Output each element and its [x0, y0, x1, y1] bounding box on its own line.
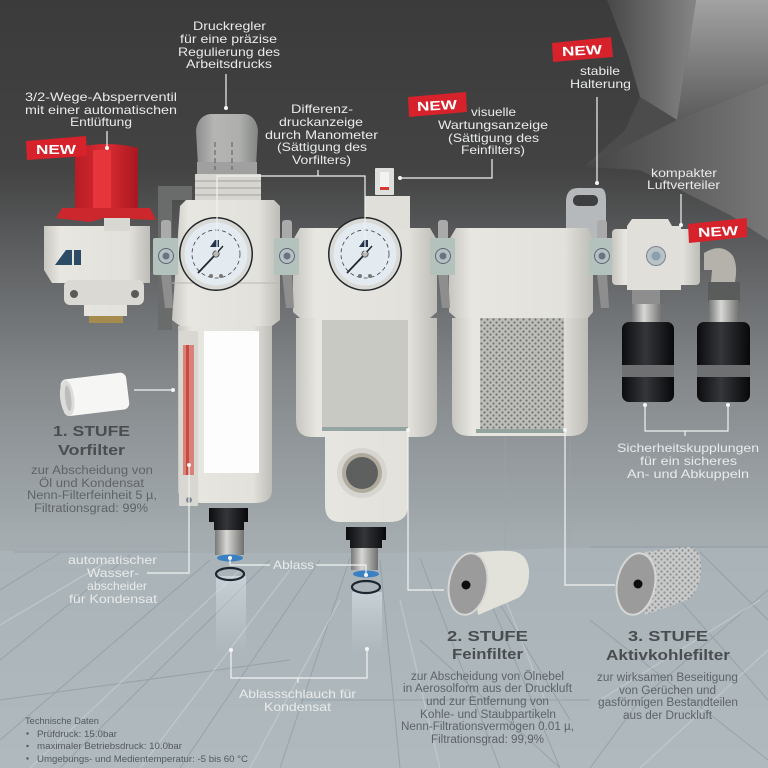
badge: NEW maintenance indicator: [408, 92, 467, 117]
label: bracket: Halterung: [570, 77, 631, 91]
text block: stage 2: Filtrationsgrad: 99,9%: [431, 734, 544, 746]
badge: NEW distributor: [688, 218, 747, 243]
technical data: Technische Daten: [25, 716, 99, 727]
text block: stage 2: Feinfilter: [452, 646, 523, 663]
text block: stage 2: in Aerosolform aus der Druckluft: [403, 683, 573, 695]
label: shut-off valve: [25, 90, 177, 129]
text block: stage 1: zur Abscheidung von: [31, 465, 153, 477]
badge: NEW maintenance indicator: NEW: [417, 97, 458, 114]
text block: stage 1: Öl und Kondensat: [39, 478, 145, 490]
text block: stage 2: Nenn-Filtrationsvermögen 0.01 µ,: [401, 721, 574, 733]
label: maintenance indicator: (Sättigung des: [448, 131, 539, 145]
label: shut-off valve: 3/2-Wege-Absperrventil: [25, 90, 177, 104]
label: air distributor: kompakter: [651, 166, 717, 180]
gauge: differential pressure: [328, 217, 402, 291]
text block: stage 1: 1. STUFE: [53, 423, 130, 440]
label: water separator: abscheider: [87, 579, 147, 593]
label: drain: Ablass: [273, 558, 314, 572]
label: safety couplings: [617, 441, 759, 481]
badge: NEW bracket: NEW: [562, 42, 603, 59]
label: maintenance indicator: Wartungsanzeige: [438, 118, 548, 132]
decorative facets top right: [584, 0, 768, 240]
text block: stage 2: zur Abscheidung von Ölnebel: [411, 671, 564, 683]
label: air distributor: Luftverteiler: [647, 178, 720, 192]
technical data: [25, 716, 248, 765]
label: shut-off valve: mit einer automatischen: [25, 103, 177, 117]
text block: stage 3: gasförmigen Bestandteilen: [598, 697, 738, 709]
label: air distributor: [647, 166, 720, 192]
label: safety couplings: Sicherheitskupplungen: [617, 441, 759, 455]
text block: stage 1: Filtrationsgrad: 99%: [34, 503, 148, 515]
label: pressure regulator: Arbeitsdrucks: [186, 57, 272, 71]
product: stage 1 prefilter: [172, 114, 280, 654]
label: maintenance indicator: visuelle: [471, 105, 516, 119]
badge: NEW valve: [26, 136, 87, 160]
label: water separator: für Kondensat: [69, 592, 158, 606]
label: drain hose: Ablassschlauch für: [239, 687, 356, 701]
technical data: Umgebungs- und Medientemperatur: -5 bis 60 °C: [37, 754, 248, 765]
label: pressure regulator: [178, 19, 280, 71]
text block: stage 2: Kohle- und Staubpartikeln: [420, 709, 556, 721]
label: drain hose: [239, 687, 356, 714]
label: differential pressure: [265, 102, 378, 167]
label: pressure regulator: Druckregler: [193, 19, 266, 33]
label: safety couplings: für ein sicheres: [640, 454, 737, 468]
technical data: Prüfdruck: 15.0bar: [37, 729, 117, 740]
product: mounting brackets: [158, 186, 606, 330]
technical data: maximaler Betriebsdruck: 10.0bar: [37, 741, 182, 752]
text block: stage 3: von Gerüchen und: [619, 685, 716, 697]
leader lines: [105, 74, 730, 683]
text block: stage 3: zur wirksamen Beseitigung: [597, 672, 738, 684]
text block: stage 2: [401, 628, 574, 746]
label: water separator: Wasser-: [87, 566, 139, 580]
label: pressure regulator: für eine präzise: [180, 32, 277, 46]
label: differential pressure: durch Manometer: [265, 128, 378, 142]
label: water separator: automatischer: [68, 553, 157, 567]
label: differential pressure: (Sättigung des: [277, 140, 367, 154]
label: safety couplings: An- und Abkuppeln: [627, 467, 749, 481]
text block: stage 2: 2. STUFE: [447, 628, 528, 645]
label: maintenance indicator: [438, 105, 548, 157]
text block: stage 3: aus der Druckluft: [623, 710, 713, 722]
text block: stage 3: [597, 628, 738, 722]
product: clamps: [153, 220, 614, 308]
label: drain hose: Kondensat: [264, 700, 332, 714]
cartridge: fine filter: [444, 550, 529, 618]
text block: stage 2: und zur Entfernung von: [426, 696, 549, 708]
label: bracket: stabile: [580, 64, 620, 78]
cartridge: activated carbon filter: [612, 547, 701, 618]
text block: stage 3: Aktivkohlefilter: [606, 647, 730, 664]
badge: NEW bracket: [552, 37, 613, 62]
product: stage 3 activated carbon filter: [449, 228, 593, 436]
badge: NEW distributor: NEW: [698, 223, 739, 240]
cartridge: prefilter: [58, 372, 130, 417]
label: bracket: [570, 64, 631, 91]
gauge: pre-filter regulator: [179, 217, 253, 291]
product: stage 2 fine filter: [293, 168, 437, 654]
product: shut-off valve: [44, 144, 156, 323]
text block: stage 1: [27, 423, 157, 515]
label: differential pressure: druckanzeige: [279, 115, 363, 129]
label: shut-off valve: Entlüftung: [70, 115, 132, 129]
label: differential pressure: Vorfilters): [292, 153, 351, 167]
text block: stage 3: 3. STUFE: [628, 628, 708, 645]
label: maintenance indicator: Feinfilters): [461, 143, 525, 157]
text block: stage 1: Nenn-Filterfeinheit 5 µ,: [27, 490, 157, 502]
label: pressure regulator: Regulierung des: [178, 45, 280, 59]
text block: stage 1: Vorfilter: [58, 442, 125, 459]
label: differential pressure: Differenz-: [291, 102, 353, 116]
product: air distributor with couplings: [612, 219, 750, 402]
badge: NEW valve: NEW: [36, 142, 77, 157]
label: water separator: [68, 553, 158, 606]
